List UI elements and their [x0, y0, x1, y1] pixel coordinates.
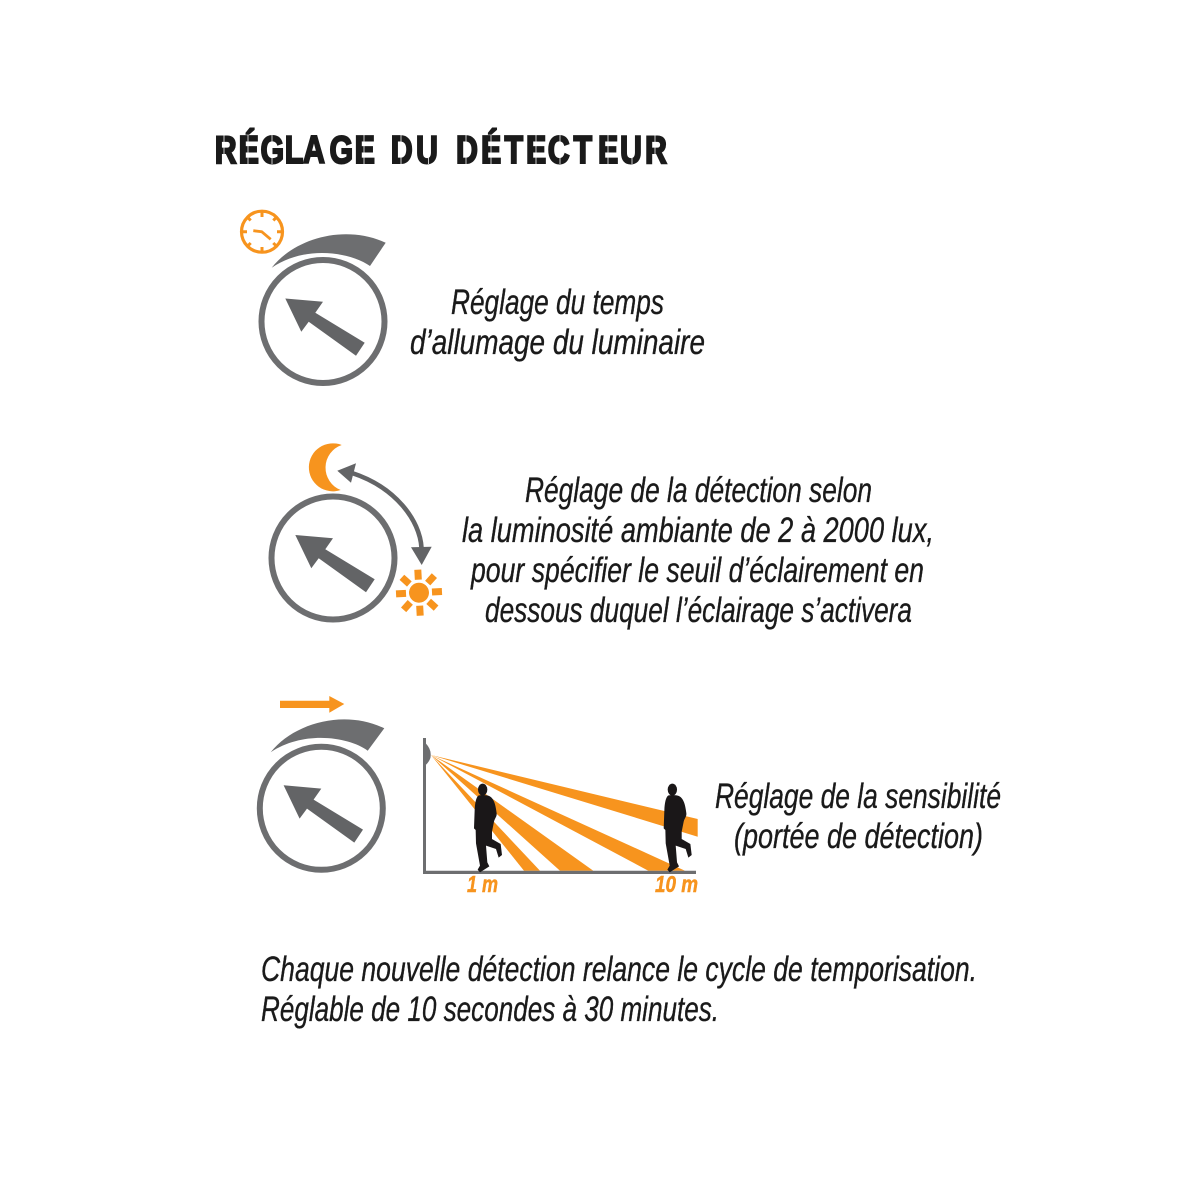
text: sensitivity setting: (portée de détection): [734, 817, 983, 856]
icon: moon: [309, 443, 342, 491]
text: luminosity setting: pour spécifier le seuil d’éclairement en: [470, 551, 924, 590]
panel: luminosity setting: [272, 443, 934, 630]
title: [215, 127, 667, 172]
icon: clock: [241, 211, 283, 253]
icon: dial sweep arc: [271, 719, 384, 752]
detection beams: [431, 755, 698, 871]
icon: luminosity dial: [272, 496, 394, 620]
icon: time dial: [262, 260, 384, 383]
text: luminosity setting: Réglage de la détection selon: [525, 471, 872, 510]
label: 10 m: 10 m: [655, 871, 698, 897]
text: time setting: Réglage du temps: [451, 283, 664, 322]
text: time setting: [410, 283, 705, 362]
icon: sensitivity dial: [260, 747, 383, 870]
panel: time setting: [241, 211, 705, 383]
figure: person at 10 m: [664, 784, 692, 872]
wall and ground axes: [423, 738, 696, 874]
panel: sensitivity setting: [260, 696, 1001, 897]
label: 1 m: 1 m: [467, 871, 498, 897]
text: closing note: [261, 950, 977, 1029]
icon: double arrow: [337, 463, 432, 565]
text: luminosity setting: [462, 471, 934, 630]
icon: sensor: [426, 743, 431, 765]
text: closing note: Chaque nouvelle détection relance le cycle de temporisation.: [261, 950, 977, 989]
text: closing note: Réglable de 10 secondes à 30 minutes.: [261, 990, 719, 1029]
title: DÉTECTEUR: [456, 127, 667, 172]
icon: sun: [395, 569, 443, 617]
chart: detection range diagram: [423, 738, 698, 897]
icon: orange arrow: [280, 696, 344, 713]
icon: dial sweep arc: [272, 234, 386, 268]
text: sensitivity setting: Réglage de la sensibilité: [715, 777, 1001, 816]
figure: person at 1 m: [474, 784, 502, 872]
title: DU: [391, 128, 438, 172]
title: RÉGLAGE: [215, 127, 375, 172]
text: luminosity setting: la luminosité ambiante de 2 à 2000 lux,: [462, 511, 934, 550]
text: luminosity setting: dessous duquel l’éclairage s’activera: [485, 591, 912, 630]
text: time setting: d’allumage du luminaire: [410, 323, 705, 362]
text: sensitivity setting: [715, 777, 1001, 856]
